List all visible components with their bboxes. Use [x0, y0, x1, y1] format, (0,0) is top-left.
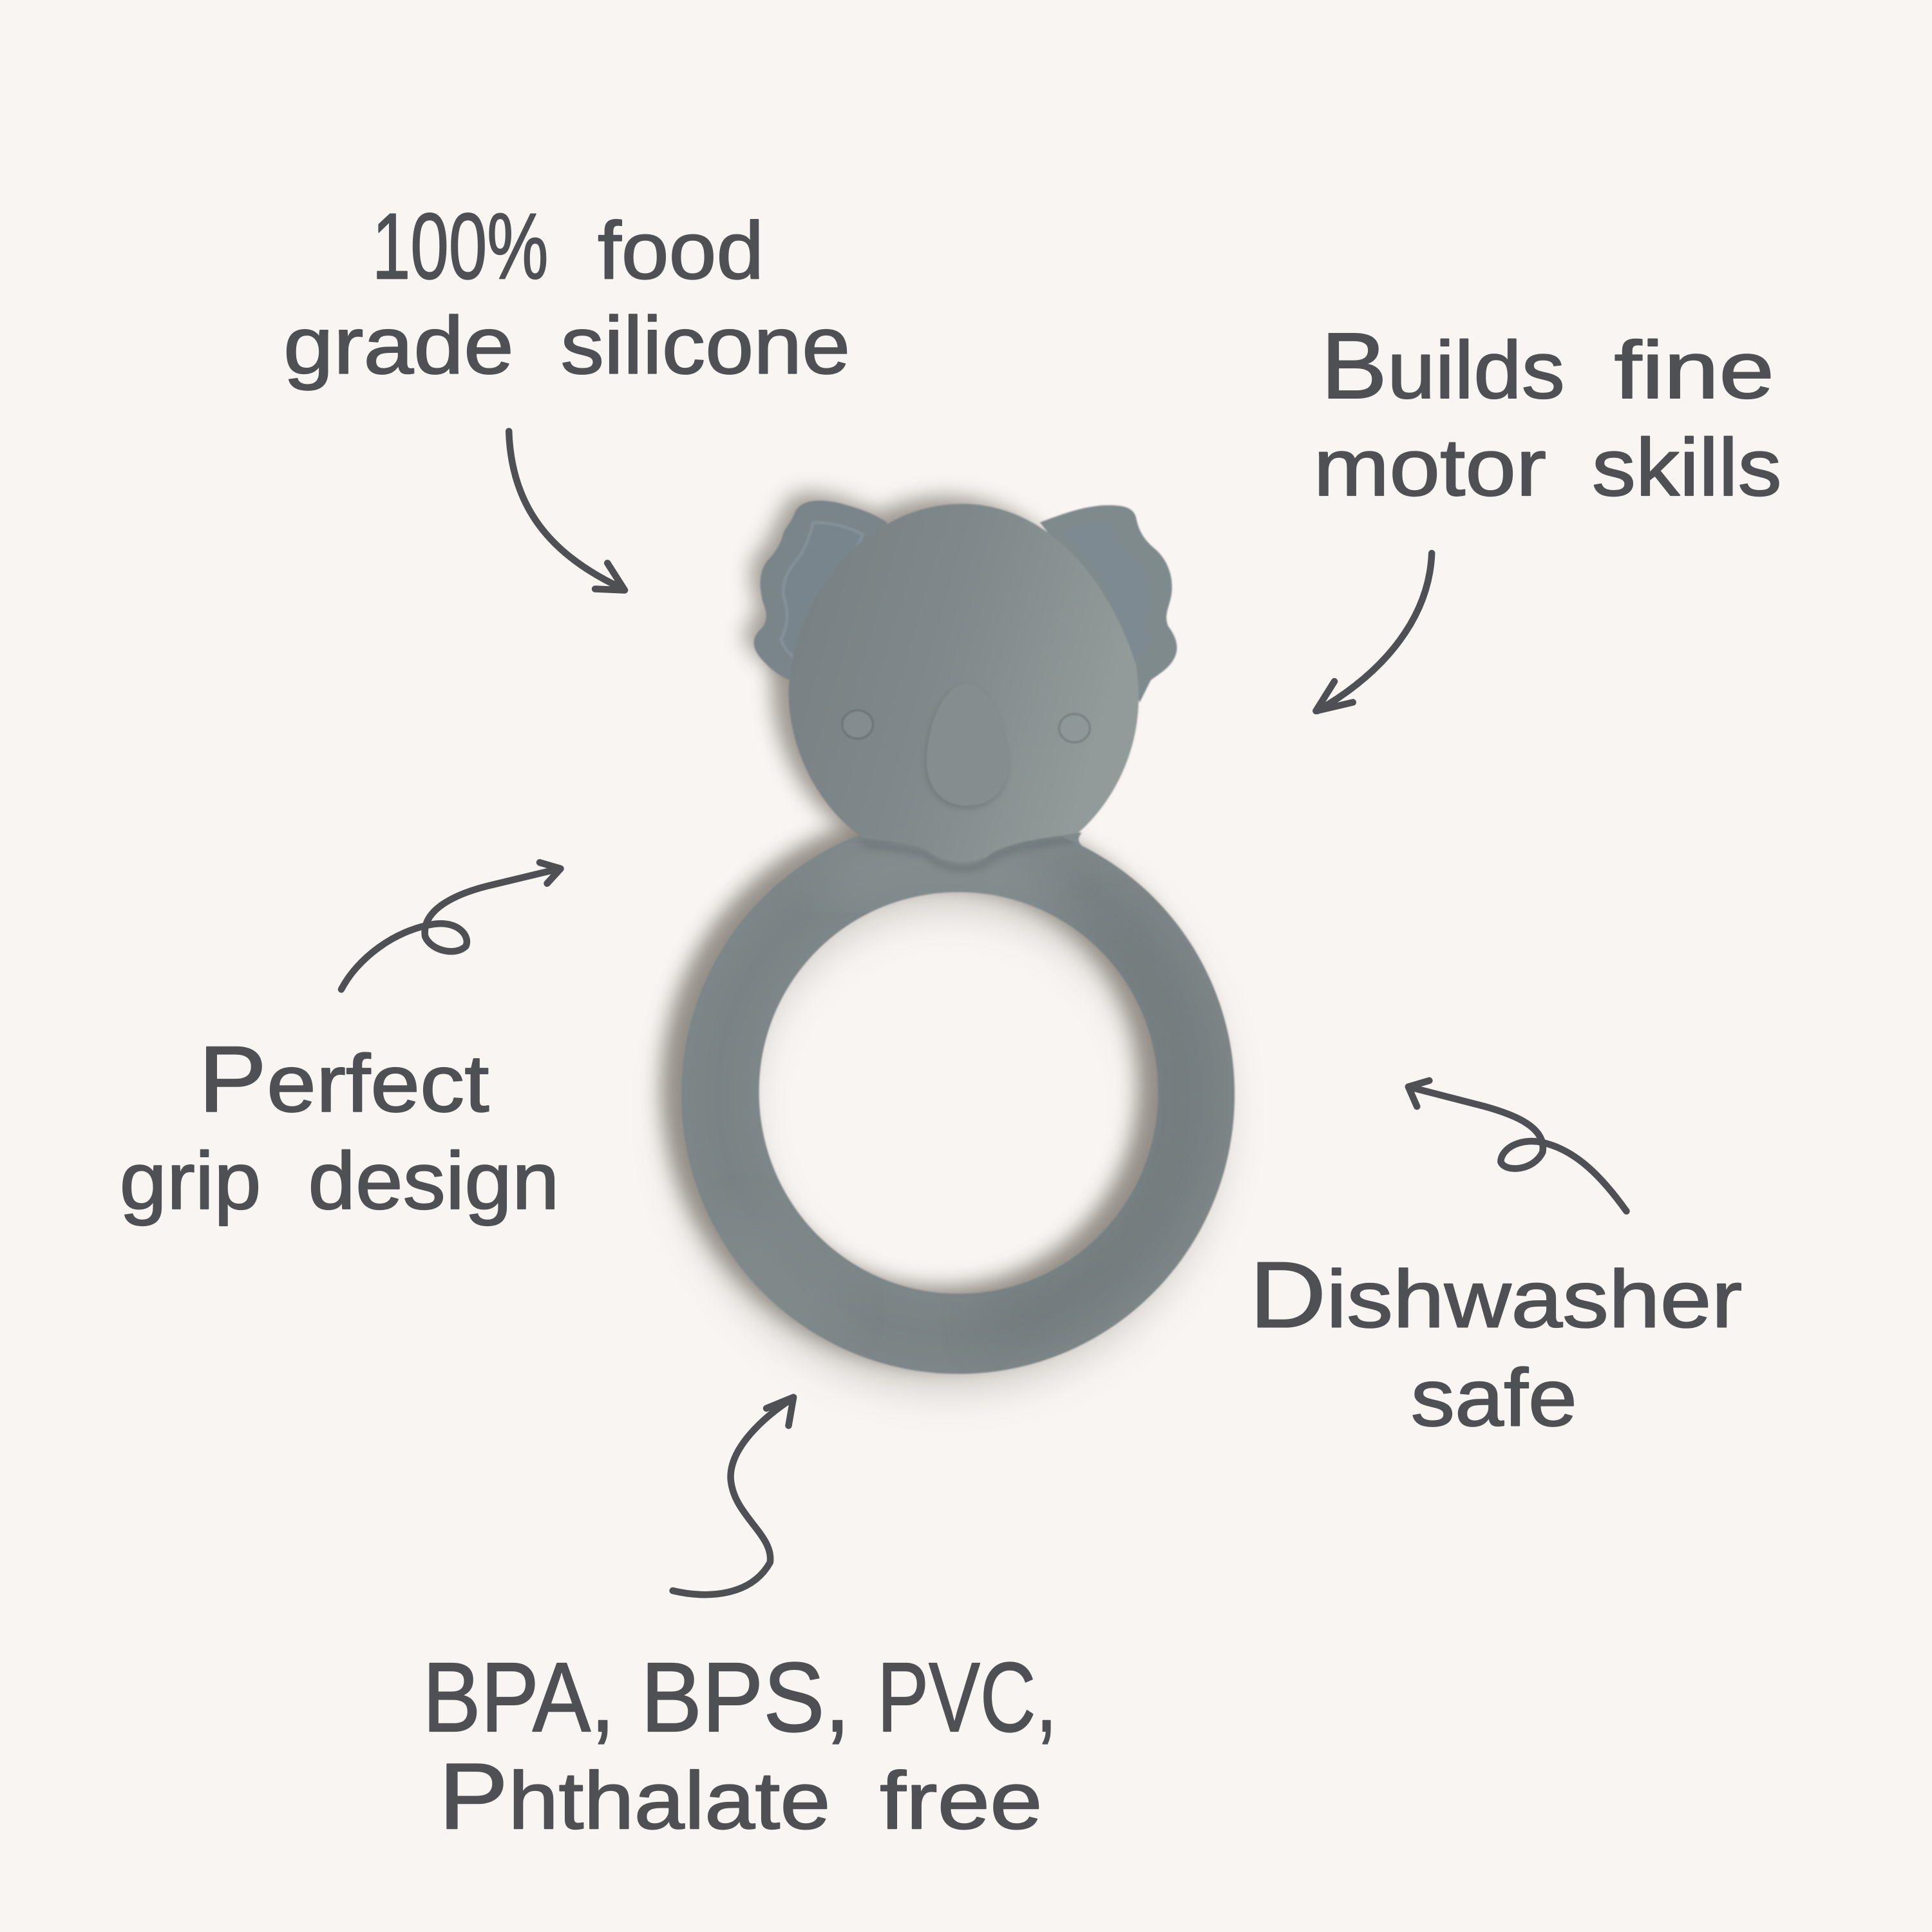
label text: Builds — [1321, 313, 1565, 418]
callout: perfect grip design — [120, 862, 561, 1226]
callout: food grade silicone — [283, 193, 850, 590]
teether shadow — [661, 492, 1225, 1391]
koala teether product — [681, 500, 1235, 1374]
nose — [925, 684, 1008, 808]
left eye — [842, 710, 873, 739]
callout: dishwasher safe — [1249, 1081, 1742, 1443]
label text: safe — [1411, 1352, 1577, 1443]
callout: fine motor skills — [1314, 313, 1782, 711]
label text: 100% — [372, 193, 548, 298]
label text: grade — [283, 300, 514, 391]
arrow — [1316, 553, 1432, 711]
label text — [120, 1027, 560, 1226]
arrow — [1408, 1081, 1627, 1211]
label text: Perfect — [198, 1027, 489, 1132]
arrow — [673, 1397, 793, 1595]
label text — [1249, 1242, 1742, 1443]
right eye — [1059, 714, 1090, 743]
label text: PVC, — [877, 1642, 1057, 1752]
label text: silicone — [561, 300, 850, 391]
label text: skills — [1592, 422, 1782, 513]
arrow — [509, 431, 625, 590]
label text: grip — [120, 1135, 261, 1226]
label text: free — [880, 1755, 1043, 1846]
arrow — [341, 862, 561, 989]
label text: Dishwasher — [1249, 1242, 1742, 1347]
label text: food — [598, 205, 764, 296]
label text: BPS, — [641, 1642, 850, 1752]
label text — [283, 193, 850, 391]
label text: motor — [1314, 422, 1546, 513]
koala head — [788, 504, 1139, 862]
infographic canvas — [122, 213, 1779, 1830]
left ear — [754, 500, 887, 685]
right ear — [1040, 505, 1177, 703]
label text: design — [308, 1135, 560, 1226]
label text: BPA, — [422, 1642, 615, 1752]
label text: Phthalate — [439, 1743, 831, 1848]
silicone ring — [681, 817, 1235, 1374]
callout: BPA free — [422, 1397, 1057, 1848]
label text: fine — [1614, 325, 1774, 415]
label text — [1314, 313, 1782, 513]
label text — [422, 1642, 1057, 1848]
